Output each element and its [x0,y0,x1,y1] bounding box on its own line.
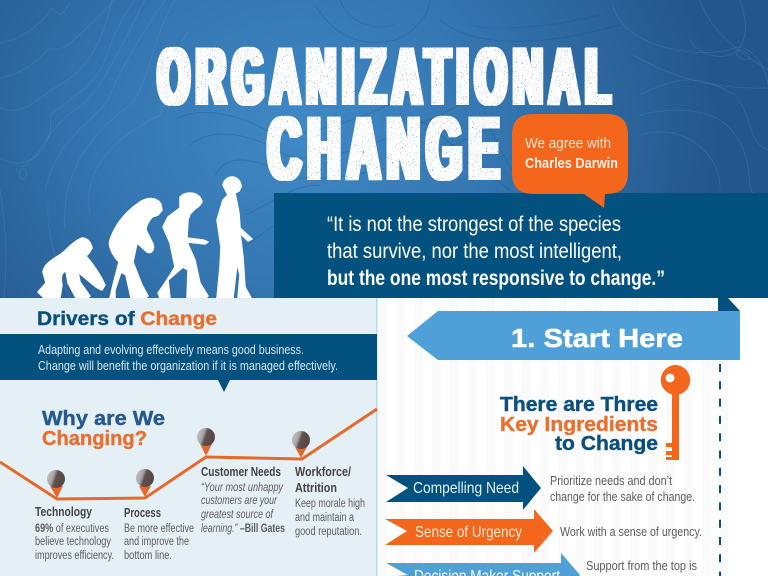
intro band: Change will benefit the organization if it is managed effectively. [38,359,338,373]
pins [47,428,310,498]
text: process: and improve the [124,536,189,548]
text: workforce attrition: and maintain a [295,512,354,524]
text: customer needs: learning.” –Bill Gates [201,523,285,535]
speech bubble: We agree with Charles Darwin: Charles Darwin [525,155,618,172]
quote panel: “It is not the strongest of the species [327,213,621,236]
text: process [124,505,194,562]
text: customer needs: Customer Needs [201,464,281,479]
text: workforce attrition: Attrition [295,480,337,495]
text: workforce attrition: Keep morale high [295,498,365,510]
text: customer needs: greatest source of [201,509,274,521]
speech bubble: We agree with Charles Darwin [512,114,628,208]
header background [0,0,768,298]
figure: early hominid [109,198,162,298]
text: technology: improves efficiency. [35,550,114,562]
intro band: Adapting and evolving effectively means good business. [38,343,304,357]
heading: why are we changing: Why are We [42,408,165,430]
arrow: sense of urgency: Sense of Urgency [415,524,522,541]
arrow: compelling need: Compelling Need [413,480,519,497]
text: workforce attrition [295,464,365,538]
figure: upright hominid [158,193,208,298]
text: process: Be more effective [124,523,194,535]
text: workforce attrition: good reputation. [295,526,362,538]
arrow: decision maker support [386,553,580,576]
text: technology: believe technology [35,536,111,548]
text: customer needs [201,464,285,535]
contour line pattern [0,0,768,298]
text: process: Process [124,505,161,520]
figure: human [217,177,252,298]
speech bubble: We agree with Charles Darwin: We agree with [525,135,611,152]
arrow: sense of urgency [385,509,553,553]
title: CHANGE [268,98,506,198]
panel: drivers of change [0,298,378,576]
intro band [0,334,377,392]
text: customer needs: “Your most unhappy [201,482,284,494]
text: workforce attrition: Workforce/ [295,464,351,479]
panel: start here [378,298,768,576]
heading: three key ingredients: Key Ingredients [500,414,658,436]
banner: 1. start here [407,311,740,360]
icon: key [661,365,690,460]
heading: why are we changing: Changing? [42,428,147,450]
heading: three key ingredients: There are Three [500,394,658,416]
evolution silhouettes [38,177,252,298]
text: customer needs: customers are your [201,495,278,507]
heading: drivers of change: Drivers of Change [37,309,217,330]
text: sense of urgency description: Work with a sense of urgency. [560,524,702,539]
title [158,32,617,198]
figure: ape [38,238,105,298]
text: process: bottom line. [124,550,172,562]
timeline dashes [719,360,721,576]
trend line [0,409,377,499]
quote panel: but the one most responsive to change.” [327,267,665,290]
quote panel [274,193,768,298]
text: decision maker description: Support from the top is [586,558,697,573]
text: technology: 69% of executives [35,523,109,535]
arrow: compelling need [386,466,541,510]
text: technology: Technology [35,504,93,519]
text: technology [35,504,114,562]
text: compelling need description [550,473,695,504]
heading: three key ingredients: to Change [555,433,658,455]
text: compelling need description: Prioritize needs and don’t [550,473,672,488]
heading: why are we changing [42,408,165,450]
banner: 1. start here: 1. Start Here [511,323,683,353]
banner fold [718,298,740,311]
quote panel: that survive, nor the most intelligent, [327,240,622,263]
text: compelling need description: change for the sake of change. [550,489,695,504]
heading: three key ingredients [500,394,658,455]
